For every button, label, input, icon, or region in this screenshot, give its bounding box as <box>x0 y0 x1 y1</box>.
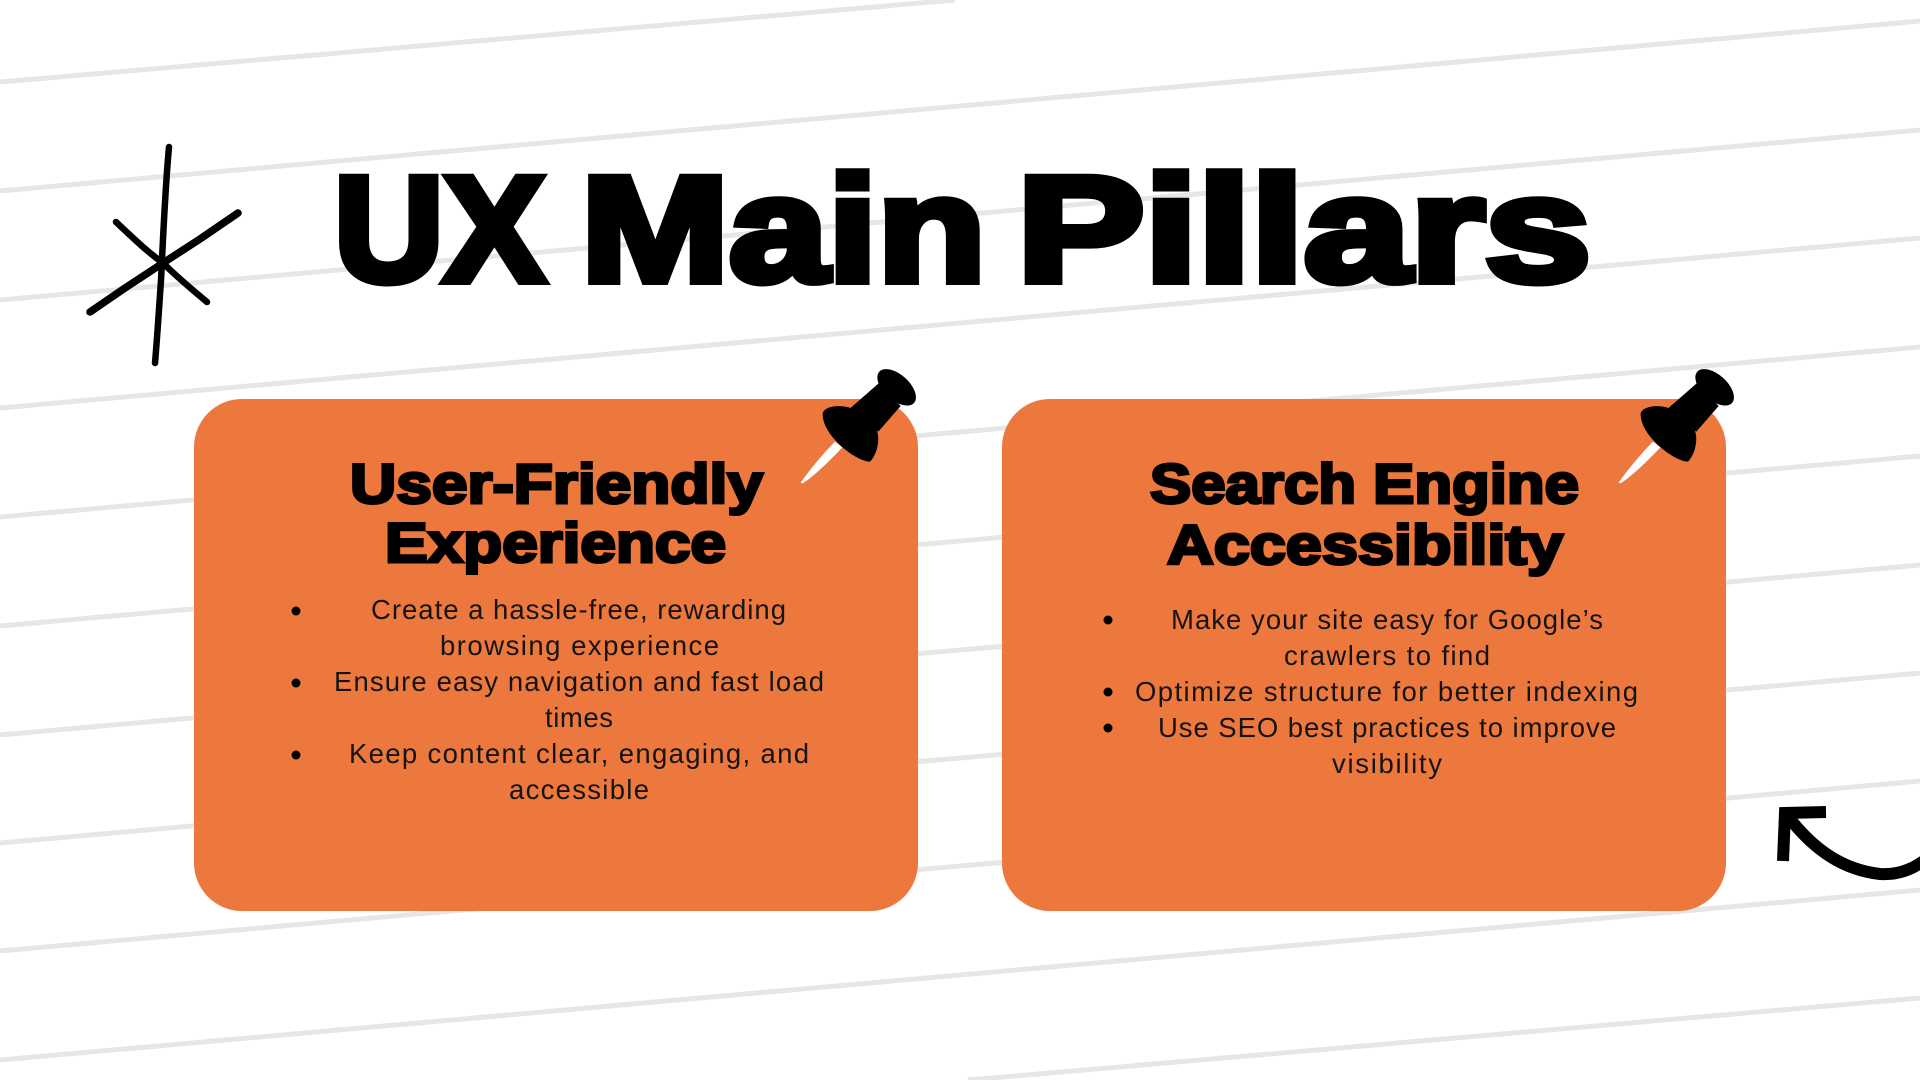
card background <box>1002 399 1726 911</box>
bullet list: Use SEO best practices to improve <box>1158 712 1616 743</box>
heading <box>1150 452 1579 576</box>
bullet list: visibility <box>1332 748 1442 779</box>
bullet list: accessible <box>509 774 649 805</box>
icon: push pin <box>801 362 922 483</box>
heading: Experience <box>385 511 726 574</box>
bullet list: Make your site easy for Google’s <box>1171 604 1603 635</box>
heading: User-Friendly <box>350 452 763 515</box>
bullet list <box>292 594 824 805</box>
bullet list: Keep content clear, engaging, and <box>349 738 809 769</box>
heading <box>350 452 763 574</box>
icon: push pin <box>1619 362 1740 483</box>
bullet list: Optimize structure for better indexing <box>1135 676 1638 707</box>
icon: hand-drawn asterisk <box>90 147 238 363</box>
bullet list: crawlers to find <box>1284 640 1490 671</box>
heading: Search Engine <box>1150 452 1579 515</box>
bullet list <box>1104 604 1638 779</box>
bullet list: times <box>545 702 613 733</box>
card background <box>194 399 918 911</box>
panel: Search Engine Accessibility <box>1002 362 1740 911</box>
bullet list: Create a hassle-free, rewarding <box>371 594 786 625</box>
bullet list: browsing experience <box>440 630 719 661</box>
title <box>334 145 1591 313</box>
bullet list: Ensure easy navigation and fast load <box>334 666 824 697</box>
heading: Accessibility <box>1167 513 1563 576</box>
title: Main <box>581 145 986 313</box>
title: UX <box>334 145 545 313</box>
title: Pillars <box>1017 145 1591 313</box>
panel: User-Friendly Experience <box>194 362 922 911</box>
icon: curved arrow <box>1783 812 1919 874</box>
